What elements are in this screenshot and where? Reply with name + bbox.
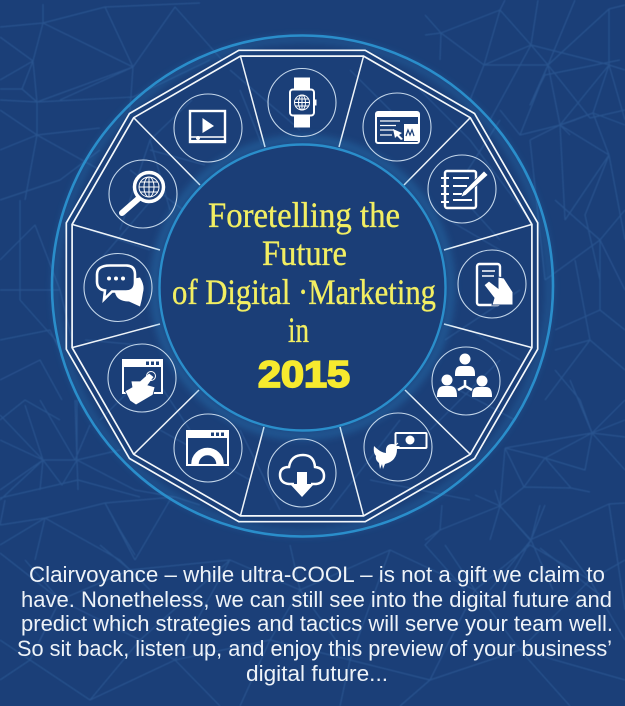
intro paragraph: [17, 562, 613, 686]
icon: browser with gear: [174, 414, 242, 482]
icon: hand on smartphone: [458, 250, 526, 318]
intro paragraph: have. Nonetheless, we can still see into the digital future and: [21, 587, 612, 612]
icon: video player: [174, 94, 242, 162]
icon: twitter bird with banknote: [364, 413, 432, 481]
icon: smart watch: [268, 68, 336, 136]
icon: hand clicking browser: [108, 344, 176, 412]
icon: web page with ad: [363, 93, 431, 161]
intro paragraph: Clairvoyance – while ultra-COOL – is not a gift we claim to: [29, 562, 605, 587]
icon: cloud download: [268, 439, 336, 507]
year 2015: 2015: [258, 354, 350, 395]
icon: notepad and pen: [428, 155, 496, 223]
title: [172, 195, 436, 350]
title: Future: [262, 233, 347, 273]
icon: magnifier with globe: [109, 160, 177, 228]
outer glowing ring: [52, 36, 553, 536]
intro paragraph: digital future...: [246, 661, 388, 686]
title: Foretelling the: [208, 195, 400, 235]
icon: connected people: [432, 347, 500, 415]
double-line dodecagon frame: [66, 50, 538, 522]
radial dividers between segments: [72, 56, 532, 516]
title: of Digital ·Marketing: [172, 272, 436, 312]
central title disc: [154, 140, 450, 436]
intro paragraph: predict which strategies and tactics will serve your team well.: [21, 611, 613, 636]
title: in: [288, 310, 309, 350]
intro paragraph: So sit back, listen up, and enjoy this preview of your business’: [17, 636, 612, 661]
icon: chat bubbles: [84, 254, 152, 322]
